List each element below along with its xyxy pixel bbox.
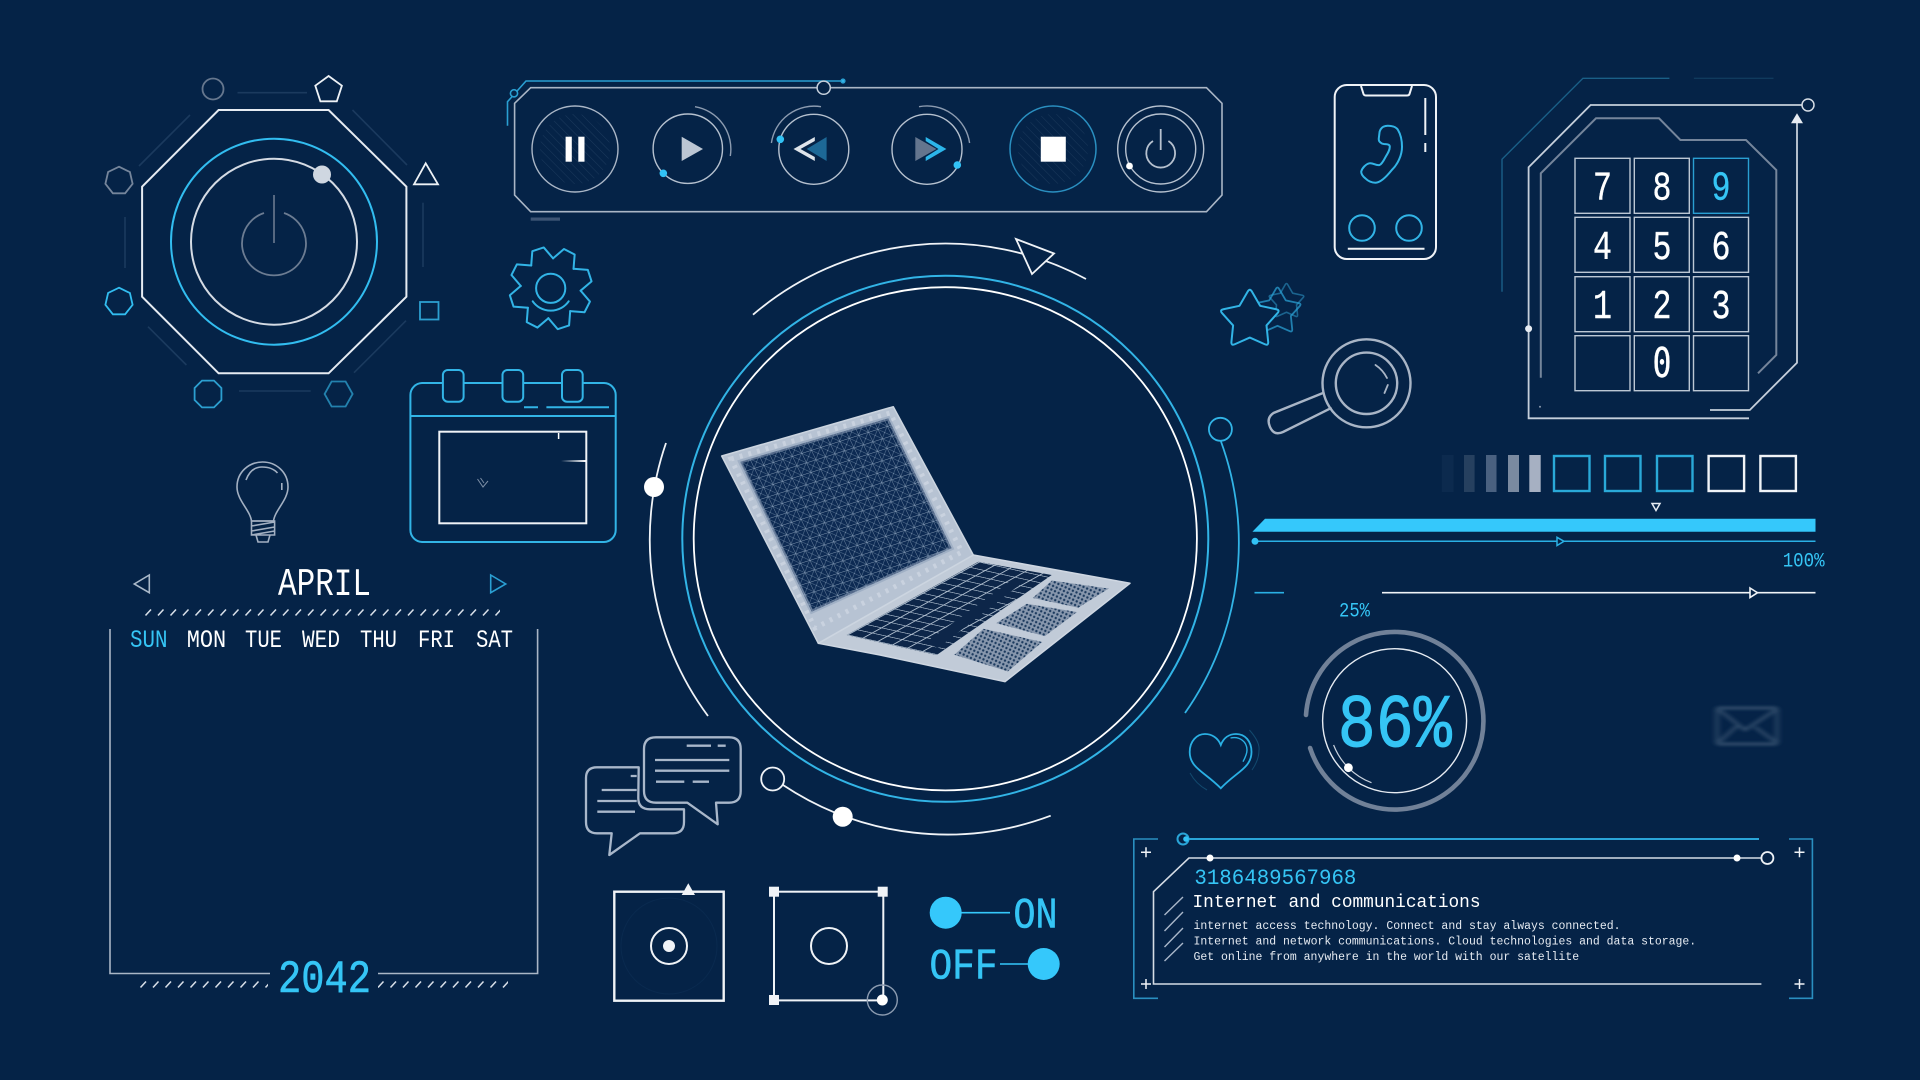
transform control <box>769 887 897 1015</box>
weekday labels: TUE <box>245 626 282 655</box>
icon: heart <box>1190 730 1259 790</box>
year slash dividers <box>140 981 508 988</box>
icon: power symbol <box>242 195 306 275</box>
circuit lines <box>1502 78 1814 418</box>
power dial panel <box>105 76 439 407</box>
progress panel <box>1252 455 1826 624</box>
icon: stars <box>1221 284 1304 345</box>
dial white ring <box>191 159 357 325</box>
keypad digits: 4 <box>1593 226 1612 272</box>
on and off toggles <box>930 892 1060 992</box>
next arrow <box>491 575 506 593</box>
calendar panel <box>110 563 538 1006</box>
button: fast forward <box>892 106 970 184</box>
calendar frame <box>110 629 538 974</box>
gauge 86% <box>1306 632 1483 810</box>
laptop base <box>818 555 1130 682</box>
keypad digits: 5 <box>1652 226 1672 272</box>
button: play <box>653 107 731 183</box>
blue progress bar <box>1252 519 1816 532</box>
level squares <box>1554 456 1796 491</box>
slider knob <box>817 81 830 94</box>
blue slider <box>1252 537 1816 546</box>
panel frame <box>515 88 1222 212</box>
inner white ring <box>694 287 1197 790</box>
toggle off: OFF <box>930 942 998 992</box>
info body text: Internet and network communications. Cloud technologies and data storage. <box>1194 936 1696 948</box>
button: rewind <box>771 106 849 184</box>
month title: APRIL <box>278 563 371 607</box>
arc arrowhead <box>1016 239 1054 274</box>
short blue dash <box>1254 592 1284 594</box>
keypad digits: 2 <box>1652 285 1672 331</box>
blue top line <box>1178 834 1759 844</box>
marker triangle <box>1652 504 1660 510</box>
shape ring around dial <box>105 76 439 407</box>
button: stop <box>1010 106 1096 192</box>
weekday labels <box>130 626 513 655</box>
laptop screen mesh <box>740 418 952 612</box>
slash divider <box>145 609 500 616</box>
gauge value arc <box>1334 745 1372 783</box>
wireframe laptop <box>722 407 1130 682</box>
icon: magnifier <box>1269 339 1410 433</box>
plus marks <box>1141 847 1804 989</box>
keypad digits: 0 <box>1652 339 1672 387</box>
white frame line <box>1154 852 1773 984</box>
keypad digits: 1 <box>1593 285 1612 331</box>
dial blue ring <box>171 139 377 345</box>
info body text: internet access technology. Connect and stay always connected. <box>1194 920 1620 933</box>
icon: gear <box>508 246 593 331</box>
media control panel <box>508 79 1222 221</box>
button: power <box>1118 106 1204 192</box>
blue ring <box>682 276 1208 802</box>
laptop lid <box>722 407 973 643</box>
gauge outer ring <box>1306 632 1483 810</box>
gauge inner ring <box>1323 649 1467 793</box>
weekday labels: WED <box>302 626 340 655</box>
toggle on: ON <box>1014 892 1058 942</box>
gauge value: 86% <box>1338 684 1452 770</box>
info body text <box>1194 920 1696 964</box>
blue connector line <box>508 79 845 126</box>
keypad digits <box>1593 166 1730 387</box>
info panel <box>1134 834 1812 998</box>
laptop trackpad panels <box>953 580 1110 672</box>
left arc with knob <box>644 443 708 716</box>
keypad digits: 3 <box>1712 285 1730 331</box>
weekday labels: MON <box>187 626 226 655</box>
keypad keys <box>1575 158 1748 391</box>
keypad digits: 9 <box>1712 166 1730 212</box>
label 100%: 100% <box>1783 550 1826 574</box>
weekday labels: THU <box>360 626 397 655</box>
laptop keyboard <box>847 562 1052 655</box>
button: pause <box>532 106 618 192</box>
label 25%: 25% <box>1339 600 1371 624</box>
icon: calendar <box>410 370 616 542</box>
keypad digits: 7 <box>1593 166 1612 212</box>
fading level bars <box>1442 455 1541 492</box>
previous arrow <box>134 575 149 593</box>
hatch marks <box>1164 897 1183 961</box>
icon: light bulb <box>237 462 288 542</box>
keypad panel <box>1502 78 1814 418</box>
small grey bar <box>531 218 560 221</box>
dial knob <box>313 166 331 184</box>
dial octagon frame <box>142 110 406 373</box>
icon: blurred mail <box>1717 708 1777 744</box>
white slider <box>1382 588 1816 598</box>
right blue arc <box>1185 418 1239 713</box>
weekday labels: SUN <box>130 626 168 655</box>
serial number: 3186489567968 <box>1194 866 1356 891</box>
info body text: Get online from anywhere in the world with our satellite <box>1194 951 1579 964</box>
year: 2042 <box>278 954 371 1006</box>
icon: chat bubbles <box>586 737 741 855</box>
target control <box>614 883 724 1001</box>
keypad digits: 8 <box>1652 166 1672 212</box>
weekday labels: SAT <box>476 626 513 655</box>
blue corner brackets <box>1134 839 1812 998</box>
central ring system <box>644 239 1239 835</box>
info heading: Internet and communications <box>1192 892 1480 913</box>
top arc <box>753 244 1086 315</box>
bottom arc with knobs <box>761 768 1051 835</box>
keypad digits: 6 <box>1712 226 1730 272</box>
icon: smartphone <box>1335 85 1436 259</box>
weekday labels: FRI <box>418 626 455 655</box>
